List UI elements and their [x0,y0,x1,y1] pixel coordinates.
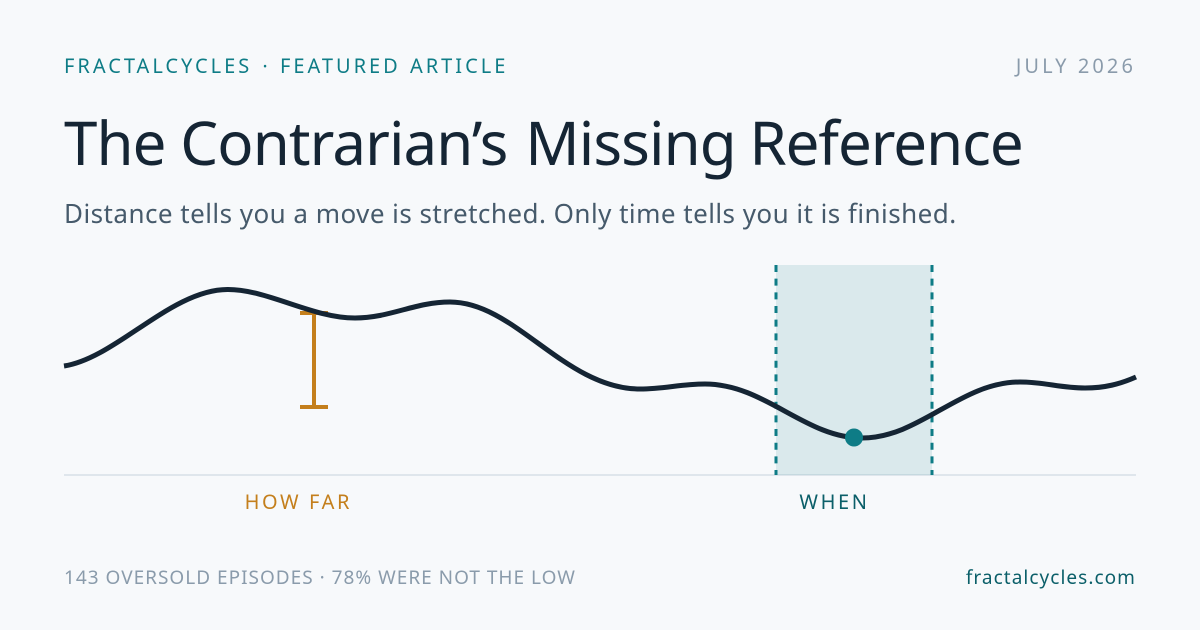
when window right edge [930,265,934,475]
chart [64,265,1136,475]
title: The Contrarian’s Missing Reference [64,101,1023,183]
price curve [64,289,1136,438]
date: JULY 2026 [1014,52,1136,79]
subtitle: Distance tells you a move is stretched. Only time tells you it is finished. [64,195,957,231]
eyebrow: FRACTALCYCLES · FEATURED ARTICLE [64,52,508,79]
baseline [64,474,1136,476]
footer url: fractalcycles.com [966,564,1136,590]
how far bracket [300,313,328,407]
footer stat: 143 OVERSOLD EPISODES · 78% WERE NOT THE LOW [64,564,576,590]
when label: WHEN [799,488,870,515]
when window left edge [774,265,778,475]
when window band [776,265,932,475]
low point marker [845,428,863,446]
how far label: HOW FAR [245,488,352,515]
